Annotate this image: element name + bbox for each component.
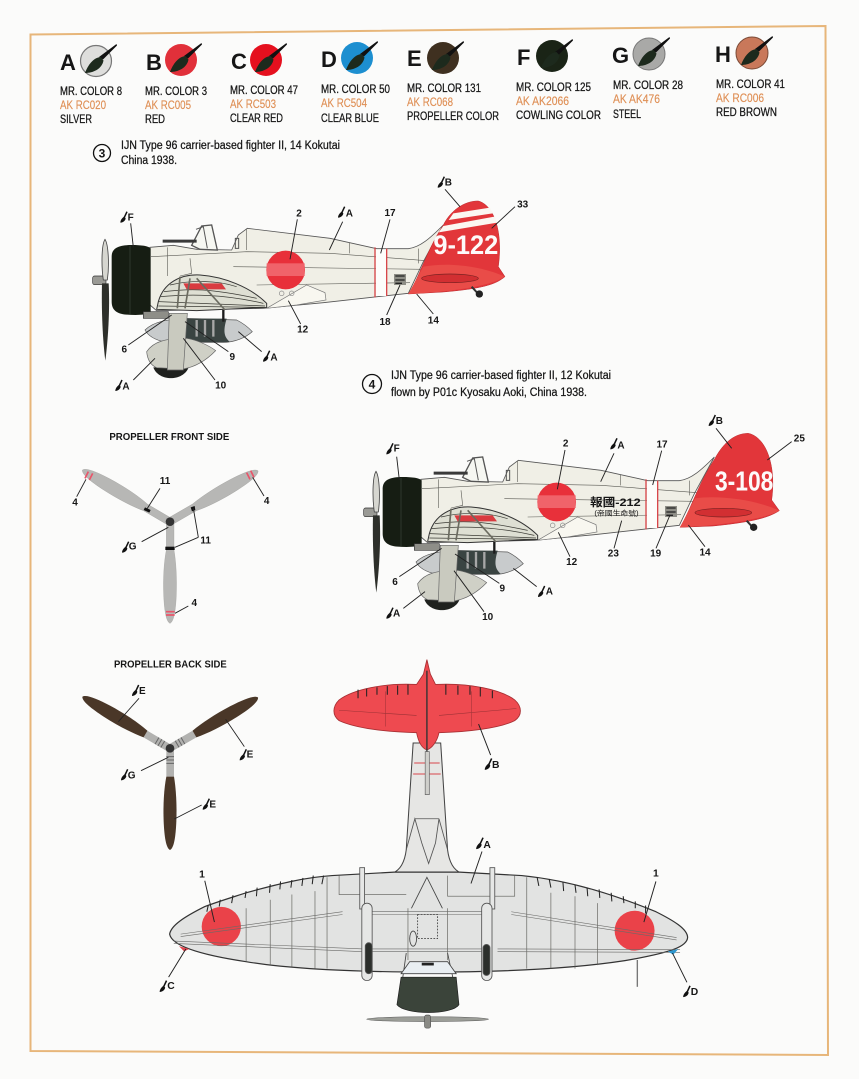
swatch B red bbox=[145, 43, 207, 126]
propeller back side: E bbox=[139, 686, 146, 697]
callouts: 14 bbox=[428, 315, 439, 326]
callouts bbox=[115, 177, 529, 392]
propeller back side bbox=[79, 685, 261, 850]
swatch B red: MR. COLOR 3 bbox=[145, 86, 207, 98]
propeller front side: G bbox=[129, 541, 137, 552]
callouts: 1 bbox=[653, 869, 659, 880]
swatch H red brown: RED BROWN bbox=[716, 107, 777, 119]
belly detail bbox=[401, 877, 456, 977]
propeller back side: G bbox=[128, 770, 136, 781]
swatch E propeller colour: E bbox=[407, 46, 422, 71]
swatch C clear red: MR. COLOR 47 bbox=[230, 85, 298, 97]
main wing bbox=[170, 872, 688, 972]
propeller front side: 11 bbox=[200, 535, 211, 546]
swatch E propeller colour: MR. COLOR 131 bbox=[407, 83, 481, 95]
caption 3: IJN Type 96 carrier-based fighter II, 14 Kokutai bbox=[121, 140, 340, 152]
swatch D clear blue: D bbox=[321, 47, 337, 72]
plan view of aircraft underside bbox=[160, 660, 699, 1028]
swatch E propeller colour: AK RC068 bbox=[407, 97, 453, 109]
cowling bbox=[397, 977, 459, 1012]
fuselage marking bbox=[590, 495, 641, 517]
swatch A silver bbox=[60, 44, 122, 126]
callouts: B bbox=[445, 178, 452, 189]
caption 3: 3 bbox=[99, 146, 106, 160]
callouts: A bbox=[617, 440, 625, 451]
swatch E propeller colour: PROPELLER COLOR bbox=[407, 111, 499, 123]
callouts: 17 bbox=[384, 208, 396, 219]
swatch A silver: A bbox=[60, 50, 76, 75]
swatch C clear red: CLEAR RED bbox=[230, 113, 283, 125]
swatch H red brown: H bbox=[715, 42, 731, 67]
swatch C clear red: AK RC503 bbox=[230, 99, 276, 111]
callouts: 12 bbox=[297, 325, 309, 336]
swatch E propeller colour bbox=[407, 41, 499, 123]
swatch F cowling colour bbox=[516, 39, 601, 122]
propeller diagrams bbox=[72, 432, 270, 850]
propeller front side: 4 bbox=[72, 498, 78, 509]
callouts: D bbox=[691, 987, 699, 998]
landing gear bbox=[360, 868, 495, 981]
swatch G steel bbox=[612, 37, 683, 121]
propeller front side: 4 bbox=[192, 598, 198, 609]
hinomaru bbox=[202, 907, 241, 946]
callouts: 25 bbox=[794, 433, 805, 444]
swatch D clear blue: MR. COLOR 50 bbox=[321, 84, 390, 96]
callouts: F bbox=[394, 444, 400, 455]
tail wheel bbox=[747, 521, 757, 531]
propeller back side: E bbox=[209, 800, 216, 811]
swatch G steel: MR. COLOR 28 bbox=[613, 80, 683, 92]
callouts: 2 bbox=[563, 439, 569, 450]
swatch G steel: STEEL bbox=[613, 109, 641, 121]
callouts: 14 bbox=[699, 548, 711, 559]
caption 3: China 1938. bbox=[121, 155, 177, 167]
propeller front side: 11 bbox=[160, 476, 171, 487]
swatch B red: B bbox=[146, 50, 162, 75]
callouts: A bbox=[122, 381, 130, 392]
fuselage marking: 報國-212 bbox=[590, 495, 641, 509]
callouts: B bbox=[716, 416, 723, 427]
callouts: 9 bbox=[230, 352, 236, 363]
swatch F cowling colour: AK AK2066 bbox=[516, 96, 569, 108]
swatch F cowling colour: F bbox=[517, 45, 530, 70]
swatch B red: AK RC005 bbox=[145, 100, 191, 112]
callouts: A bbox=[393, 609, 400, 620]
callouts: 10 bbox=[482, 612, 494, 623]
colour key bbox=[60, 36, 785, 126]
callouts: 23 bbox=[608, 549, 619, 560]
callouts: F bbox=[128, 213, 134, 224]
tailplane bbox=[334, 660, 520, 753]
tail fin red bbox=[408, 201, 505, 294]
callouts: 1 bbox=[199, 869, 205, 880]
swatch F cowling colour: COWLING COLOR bbox=[516, 110, 601, 122]
swatch G steel: G bbox=[612, 43, 629, 68]
caption 4: flown by P01c Kyosaku Aoki, China 1938. bbox=[391, 387, 587, 399]
pitot bbox=[635, 960, 639, 987]
caption 3 bbox=[94, 140, 340, 167]
callouts bbox=[160, 724, 699, 998]
callouts: A bbox=[546, 586, 553, 597]
callouts: 6 bbox=[392, 577, 398, 588]
swatch B red: RED bbox=[145, 114, 165, 126]
callouts: 17 bbox=[656, 439, 668, 450]
swatch H red brown bbox=[715, 36, 785, 119]
callouts: 19 bbox=[650, 549, 662, 560]
swatch D clear blue bbox=[321, 41, 390, 125]
callouts: 12 bbox=[566, 557, 578, 568]
swatch C clear red bbox=[230, 43, 298, 125]
swatch D clear blue: AK RC504 bbox=[321, 98, 368, 110]
callouts: 9 bbox=[500, 584, 506, 595]
propeller front side: 4 bbox=[264, 496, 270, 507]
caption 4: 4 bbox=[369, 378, 376, 392]
callouts: 10 bbox=[215, 380, 227, 391]
callouts bbox=[386, 415, 805, 623]
swatch A silver: SILVER bbox=[60, 114, 92, 126]
heading: propeller back side: PROPELLER BACK SIDE bbox=[114, 660, 227, 671]
caption 4 bbox=[362, 370, 611, 399]
callouts: A bbox=[270, 353, 278, 364]
caption 4: IJN Type 96 carrier-based fighter II, 12 Kokutai bbox=[391, 370, 611, 382]
wingtip lights bbox=[179, 946, 189, 951]
swatch F cowling colour: MR. COLOR 125 bbox=[516, 82, 591, 94]
fuselage marking: (帝國生命號) bbox=[594, 508, 639, 517]
callouts: 6 bbox=[122, 345, 128, 356]
callouts: A bbox=[346, 209, 353, 220]
swatch A silver: MR. COLOR 8 bbox=[60, 86, 122, 98]
swatch G steel: AK AK476 bbox=[613, 94, 660, 106]
tail fin red bbox=[680, 433, 779, 527]
propeller front side bbox=[72, 464, 270, 623]
swatch A silver: AK RC020 bbox=[60, 100, 106, 112]
callouts: A bbox=[483, 840, 491, 851]
callouts: B bbox=[492, 760, 500, 771]
callouts: 18 bbox=[379, 317, 391, 328]
aircraft 3 side view bbox=[93, 177, 529, 392]
swatch H red brown: MR. COLOR 41 bbox=[716, 79, 785, 91]
rear fuselage bbox=[392, 743, 461, 873]
callouts: 2 bbox=[296, 209, 302, 220]
swatch D clear blue: CLEAR BLUE bbox=[321, 113, 379, 125]
callouts: 33 bbox=[517, 200, 529, 211]
wing spars bbox=[174, 912, 680, 952]
swatch H red brown: AK RC006 bbox=[716, 93, 764, 105]
propeller edge-on bbox=[367, 1015, 489, 1028]
tail fin red: 9-122 bbox=[433, 230, 498, 260]
propeller back side: E bbox=[247, 749, 254, 760]
aircraft 4 side view bbox=[364, 415, 805, 623]
tail fin red: 3-108 bbox=[715, 466, 773, 497]
swatch C clear red: C bbox=[231, 49, 247, 74]
callouts: C bbox=[167, 981, 175, 992]
tail wheel bbox=[472, 287, 483, 298]
heading: propeller front side: PROPELLER FRONT SIDE bbox=[109, 432, 230, 443]
